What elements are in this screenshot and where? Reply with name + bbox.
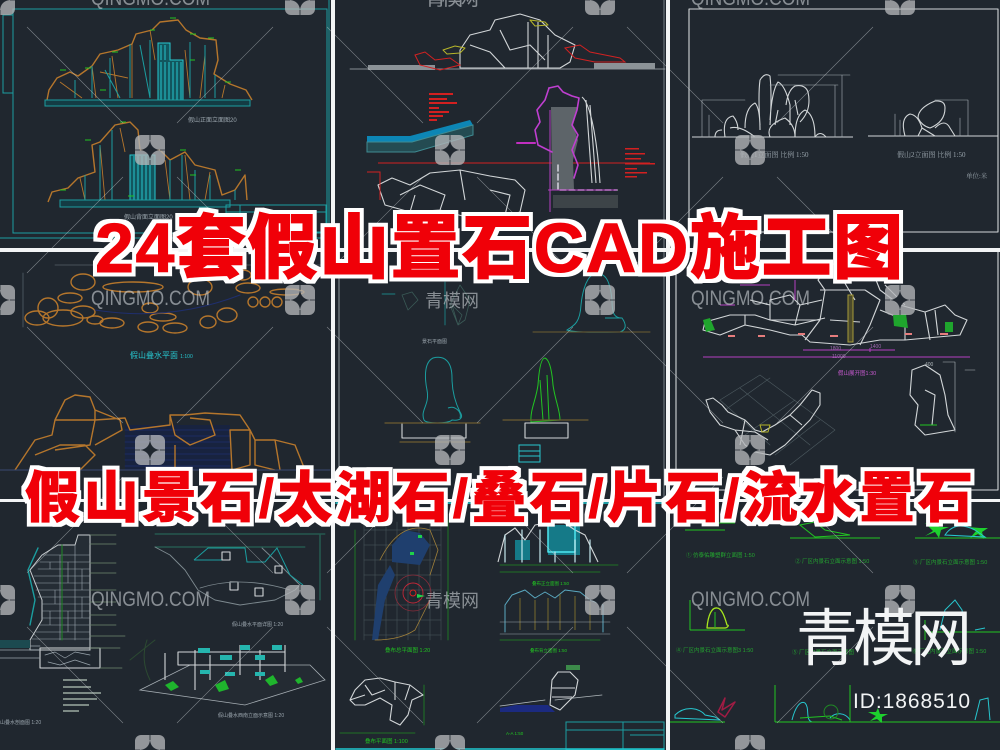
panel: double rockery elevations (0, 0, 329, 248)
rockery two elevation (868, 100, 998, 136)
upper plan of water stage (155, 534, 325, 605)
waterfall section (517, 86, 618, 212)
text watermarks: QINGMO.COM (691, 588, 810, 611)
row two teal rock (925, 600, 1000, 640)
left vertical ruler (338, 252, 340, 498)
panel: rock wall with grid (676, 252, 998, 490)
rock plan (340, 678, 424, 733)
caption one: ① 仿泰佑雕塑群立面图 1:50 (686, 551, 755, 559)
rockery two caption: 假山2立面图 比例 1:50 (897, 150, 966, 159)
section caption: A-A 1:50 (506, 731, 524, 736)
upper rock plan (382, 282, 470, 325)
green stone notes (519, 445, 540, 462)
plan of boulders (23, 265, 330, 333)
title block (566, 722, 664, 750)
cross section (500, 665, 602, 712)
units note: 单位:米 (966, 171, 988, 180)
grid plan caption: 叠布总平面图 1:20 (385, 646, 430, 654)
frame right (663, 252, 665, 498)
caption four: ④ 厂区内景石立面示意图3 1:50 (676, 646, 753, 654)
text watermarks (91, 0, 810, 611)
drawing frame (689, 9, 998, 232)
text watermarks: 青模网 (425, 291, 479, 311)
caption six: ⑥ 厂区内景石立面示意图 1:50 (912, 647, 986, 655)
rockery elevation two (48, 122, 247, 207)
blue waterfall elevation (500, 590, 610, 640)
rockery one caption: 假山1立面图 比例 1:50 (740, 150, 809, 159)
text watermarks: QINGMO.COM (91, 588, 210, 611)
panel: stacked water plan and elevation (0, 265, 330, 470)
wall caption: 假山展开图1:30 (838, 369, 876, 377)
brand logo text: 青模网 (796, 588, 972, 678)
green standing stone (503, 358, 588, 438)
model id: ID:1868510 (853, 690, 970, 713)
cyan lower border (336, 503, 664, 749)
rock wall elevation (703, 258, 970, 360)
red notes right (625, 148, 655, 178)
panel: standing stones (339, 252, 664, 498)
section caption: 山叠水剖面图 1:20 (0, 719, 41, 726)
caption two: ② 厂区内景石立面示意图 1:50 (795, 557, 869, 565)
rock plan caption: 叠布平面图 1:100 (365, 737, 408, 745)
rockery elevation two caption: 假山背面立面图20 (124, 213, 173, 221)
level markers (90, 535, 125, 668)
panel: rockery elevations with scale (689, 9, 998, 232)
red notes list (429, 93, 457, 121)
caption three: ③ 厂区内景石立面示意图 1:50 (913, 558, 987, 566)
perspective view (130, 640, 325, 705)
perspective caption: 假山叠水西南立面示意图 1:20 (218, 712, 284, 719)
caption five and six: ⑤ 厂区内景石立面示意图 (792, 648, 855, 656)
brick wall section (0, 535, 100, 668)
text watermarks: 青模网 (425, 591, 479, 611)
text watermarks: QINGMO.COM (691, 287, 810, 310)
section elevation (910, 362, 975, 435)
rock wall elevation: 1800 (830, 346, 841, 352)
panel: green landscape stone elevations (670, 521, 1000, 723)
plan caption: 假山叠水平面详图 1:20 (232, 621, 283, 628)
elevation caption: 叠布正立面图 1:50 (532, 580, 570, 587)
upper plan caption: 景石平面图 (422, 338, 447, 345)
grid plan of rocks (706, 375, 835, 465)
stacked notes (63, 679, 101, 712)
cyan waterfall elevation (498, 520, 618, 572)
panel: waterfall section details (350, 0, 665, 248)
elevation of boulders (0, 395, 330, 470)
rockery elevation one (45, 18, 252, 106)
rock plan with dimensions (367, 163, 650, 218)
right teal stone (533, 274, 650, 332)
drawing frame (0, 0, 329, 248)
title block (226, 205, 326, 232)
subtitle categories: 假山景石/太湖石/叠石/片石/流水置石 (25, 467, 973, 529)
plan caption: 假山叠水平面 1:100 (130, 350, 193, 360)
rock wall elevation: 11000 (832, 354, 846, 360)
panel: brick wall and perspective (0, 534, 325, 726)
rockery elevation one caption: 假山正面立面图20 (188, 116, 237, 124)
rock wall elevation: 1400 (870, 344, 881, 350)
elevation with planting (350, 14, 665, 70)
panel: site plan and waterfall elevations (336, 503, 664, 750)
bottom stones row (670, 685, 1000, 723)
diagonal watermark lines (27, 27, 873, 723)
grid plan (355, 520, 448, 640)
row one stones (685, 521, 1000, 539)
main title: 24套假山置石CAD施工图 (95, 209, 903, 287)
small green rock (690, 600, 745, 630)
section elevation: 400 (925, 362, 934, 368)
drawing frame (676, 252, 998, 490)
text watermarks: QINGMO.COM (91, 287, 210, 310)
teal standing stone (385, 357, 480, 442)
rockery one elevation (692, 75, 853, 137)
second elevation caption: 叠布背立面图 1:50 (530, 647, 568, 654)
slope section (367, 120, 473, 152)
